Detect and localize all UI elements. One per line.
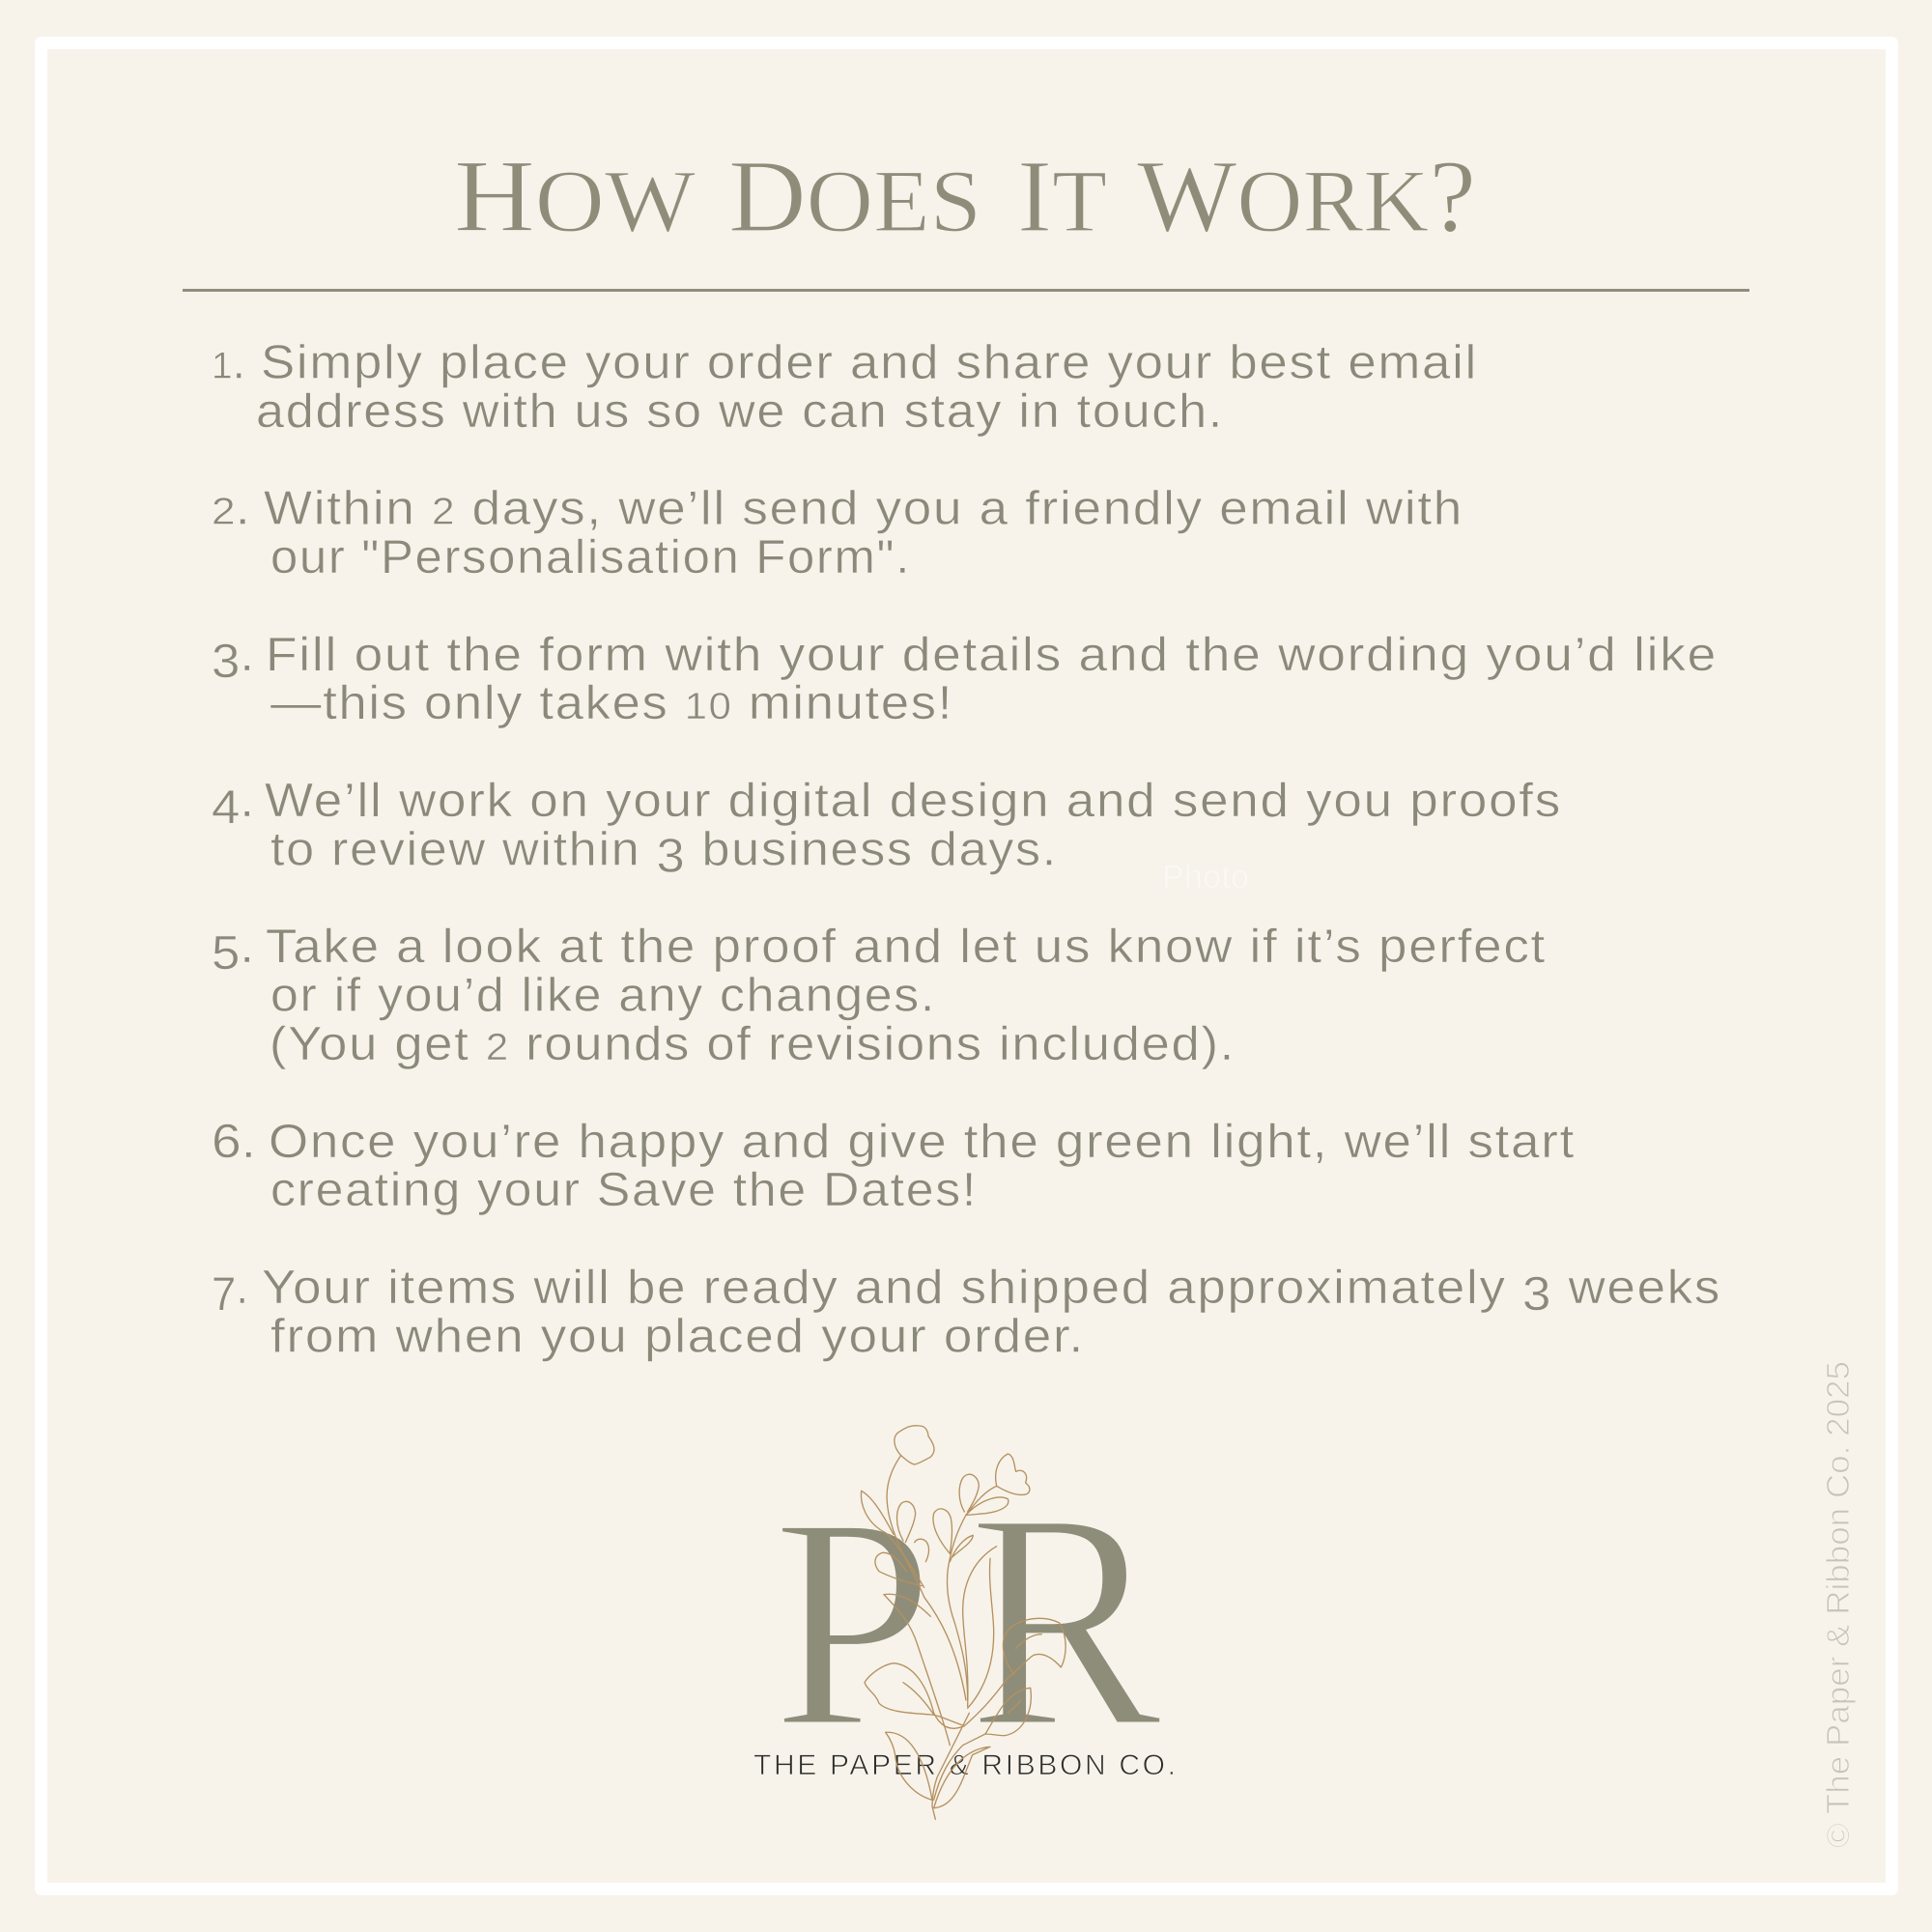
step 6 <box>212 1116 1576 1216</box>
brand logo <box>753 1426 1176 1819</box>
brand name: THE PAPER & RIBBON CO. <box>753 1749 1176 1781</box>
faint photo watermark: Photo <box>1162 859 1249 895</box>
step 4: 3 <box>657 830 686 882</box>
step 7: Your items will be ready and shipped approximately <box>262 1262 1416 1314</box>
step 7: from when you placed your order. <box>270 1310 1085 1362</box>
step 5: . <box>240 921 254 973</box>
monogram letter R: R <box>968 1449 1163 1792</box>
step 6: Once you’re happy and give the green light, we’ll start <box>269 1116 1576 1168</box>
step 4: to review within <box>270 823 619 875</box>
step 3: —this only takes 10 minutes! <box>270 677 953 729</box>
title divider <box>183 289 1749 292</box>
step 1: address with us so we can stay in touch. <box>256 385 1224 438</box>
title: IT <box>1017 140 1107 254</box>
step 7: weeks <box>1552 1262 1721 1314</box>
step 7 <box>212 1262 1721 1362</box>
title <box>454 140 1476 254</box>
step 5: Take a look at the proof and let us know if it’s perfect <box>266 921 1547 973</box>
title: HOW <box>454 140 696 254</box>
step 5: 5 <box>212 927 240 980</box>
step 3 <box>212 629 1718 729</box>
step 4: . <box>240 775 254 827</box>
steps list <box>212 336 1721 1362</box>
step 1: Simply place your order and share your best email <box>261 336 1478 388</box>
step 4: We’ll work on your digital design and send you proofs <box>265 775 1562 827</box>
title: DOES <box>728 140 981 254</box>
monogram letter P: P <box>772 1454 934 1790</box>
step 3: Fill out the form with your details and the wording you’d like <box>266 629 1718 681</box>
step 7: 3 <box>1522 1268 1552 1321</box>
step 2: 2. <box>212 483 250 535</box>
step 6: 6. <box>212 1116 256 1168</box>
step 1: 1. <box>212 336 245 388</box>
step 7: 7 <box>212 1268 236 1321</box>
copyright note, rotated: © The Paper & Ribbon Co. 2025 <box>1820 1361 1856 1848</box>
step 4 <box>212 775 1562 882</box>
step 5: or if you’d like any changes. <box>270 970 936 1022</box>
step 5: (You get 2 rounds of revisions included). <box>270 1018 1236 1070</box>
step 3: 3 <box>212 636 240 688</box>
step 5 <box>212 921 1547 1070</box>
step 3: . <box>240 629 254 681</box>
step 2 <box>212 483 1463 583</box>
step 6: creating your Save the Dates! <box>270 1164 978 1216</box>
step 4: business days. <box>686 823 1058 875</box>
icon: floral line art <box>861 1426 1065 1819</box>
step 4: 4 <box>212 781 240 834</box>
step 7: . <box>236 1262 248 1314</box>
title: WORK? <box>1137 140 1476 254</box>
step 1 <box>212 336 1478 438</box>
step 2: Within 2 days, we’ll send you a friendly email with <box>264 483 1463 535</box>
step 2: our "Personalisation Form". <box>270 531 911 583</box>
